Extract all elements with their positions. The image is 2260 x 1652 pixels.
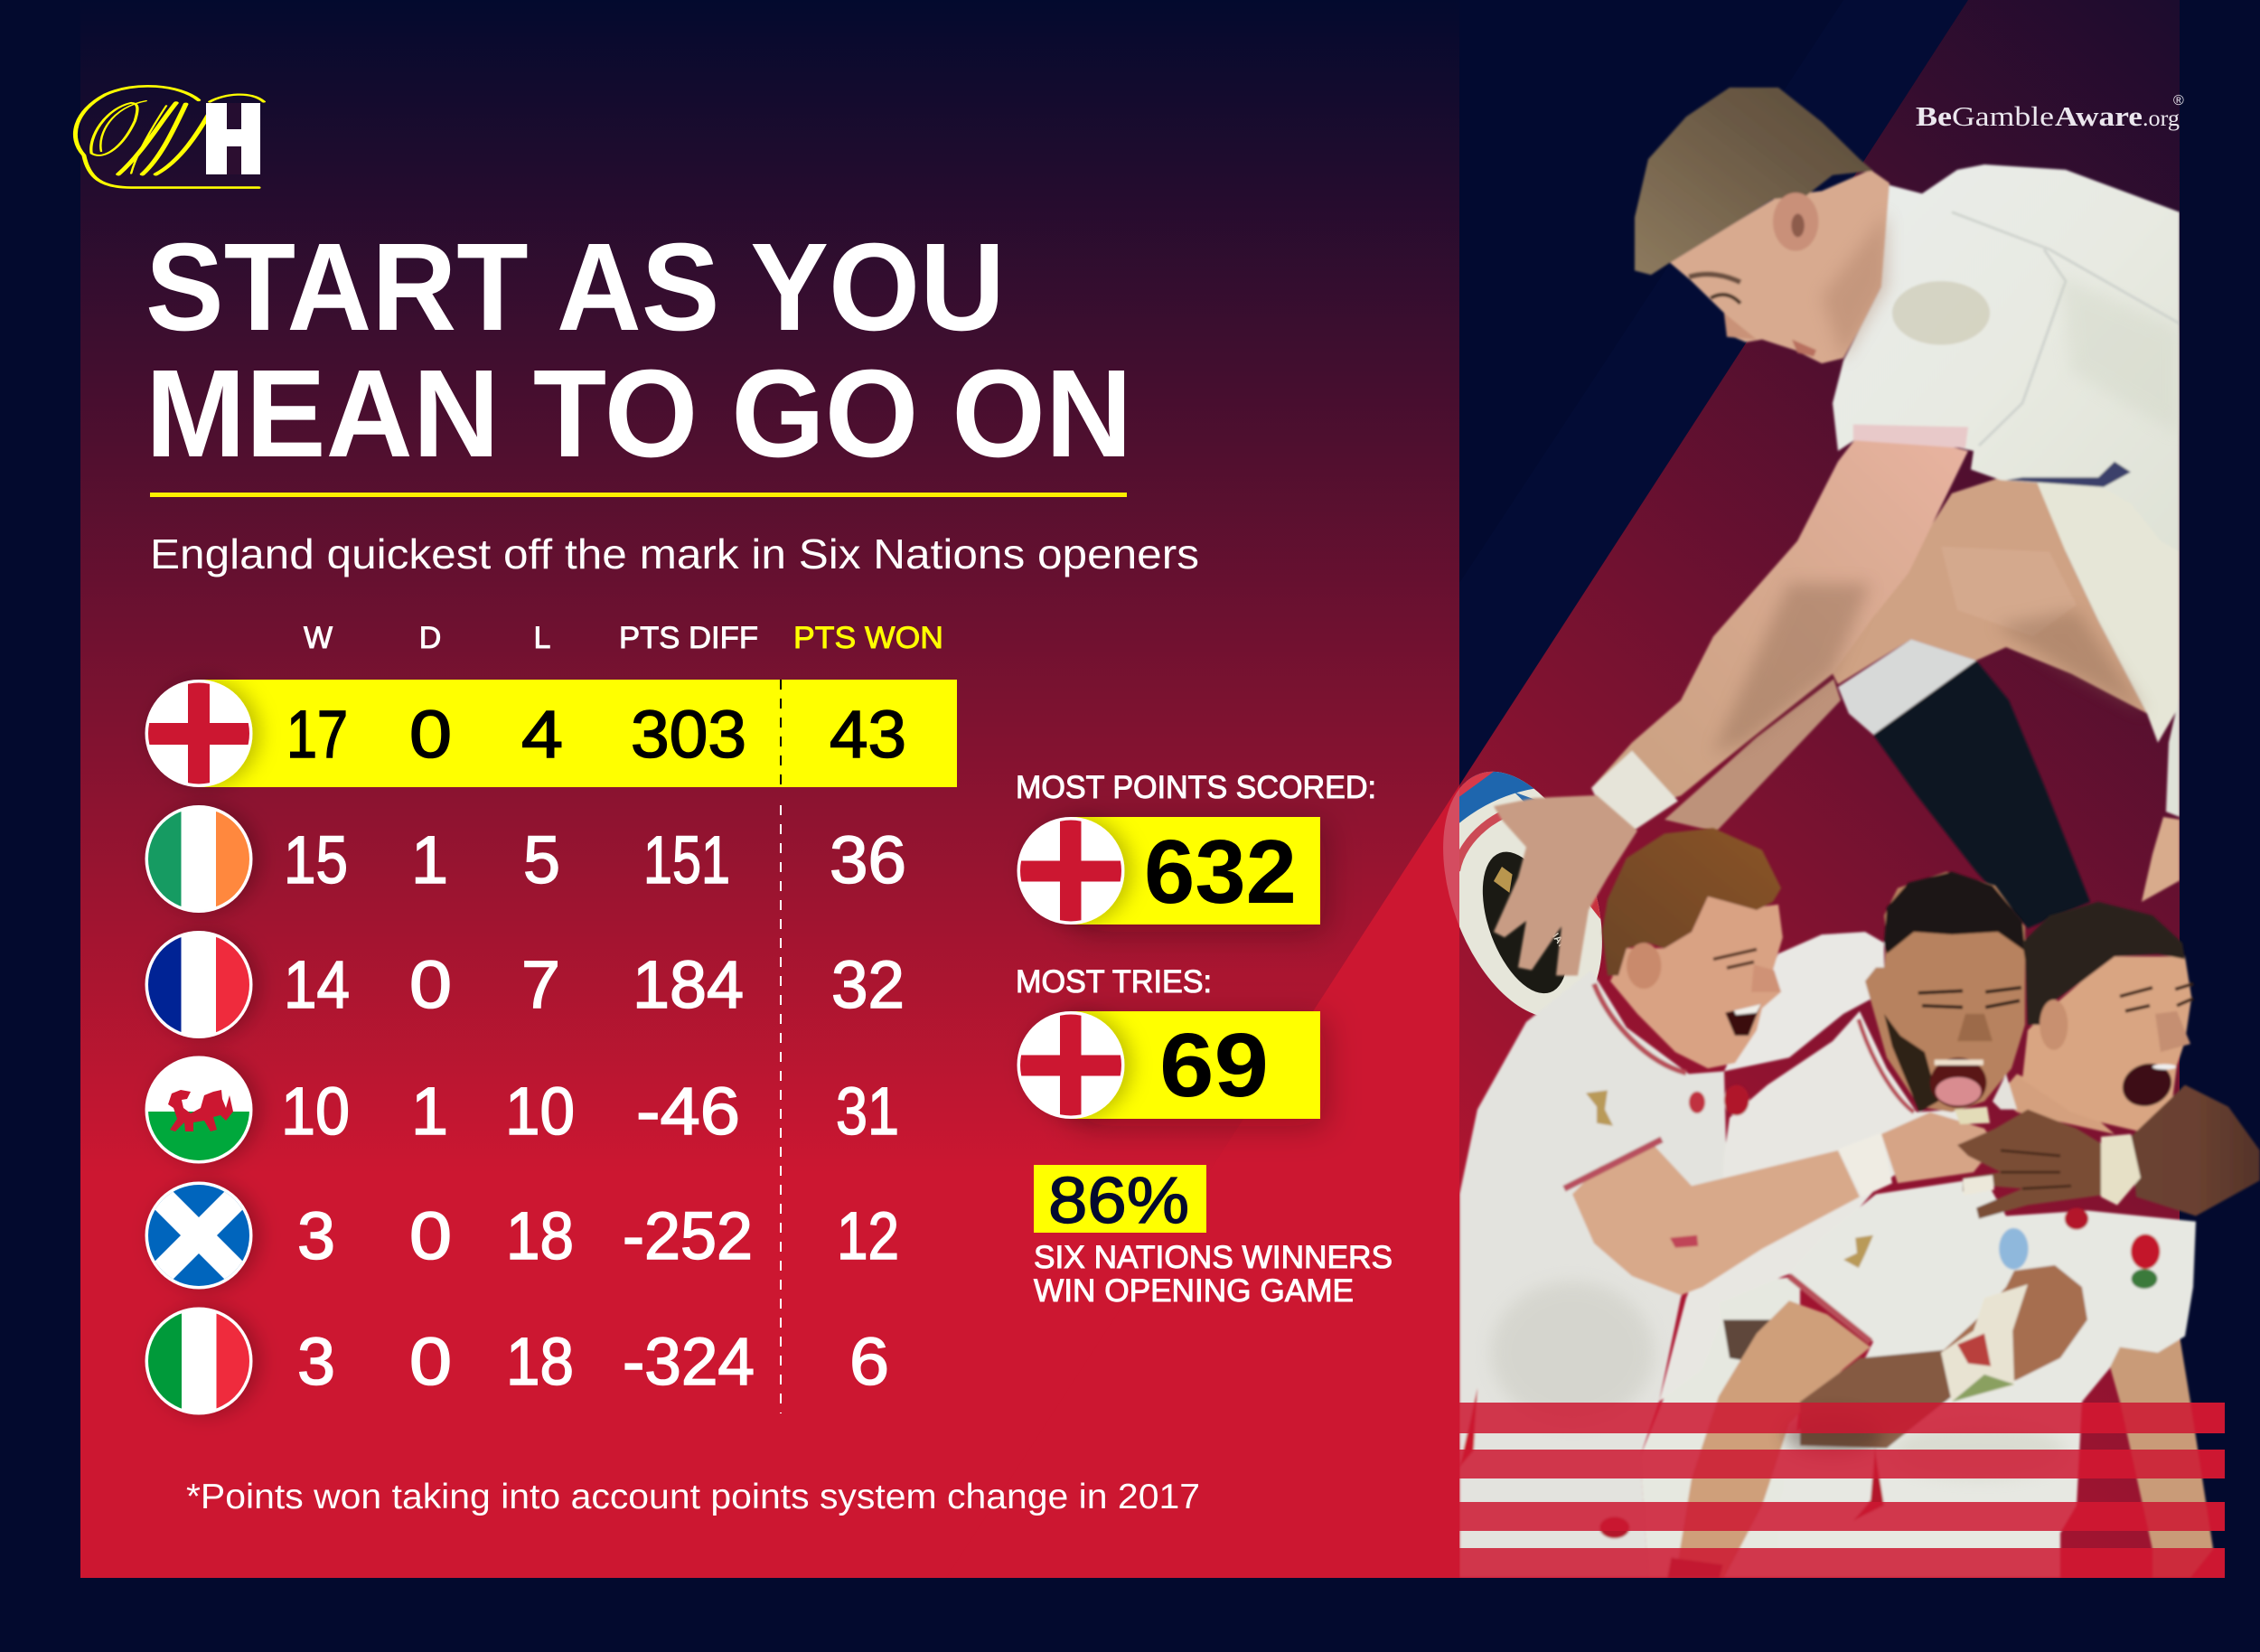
- stat: most tries: MOST TRIES:: [1016, 964, 1212, 1000]
- title underline: [150, 493, 1127, 497]
- middle nose: [1957, 1014, 1993, 1041]
- row: England: 303: [631, 697, 746, 772]
- hips: [1640, 1276, 1800, 1578]
- canterbury logo right: [2065, 1207, 2088, 1230]
- row: Italy: 6: [849, 1324, 889, 1399]
- row: Wales: -46: [636, 1074, 740, 1149]
- far right arm: [2109, 1337, 2213, 1578]
- photo: rugby ball ghost: [1412, 750, 1633, 1039]
- left mouth: [1725, 1004, 1761, 1036]
- row: Ireland: [145, 804, 906, 913]
- stat: 86 percent: WIN OPENING GAME: [1034, 1273, 1354, 1309]
- stripes: translucent overlay: [1459, 1403, 2225, 1578]
- row: Scotland: 0: [409, 1198, 452, 1273]
- stat: most tries: 69: [1159, 1015, 1269, 1116]
- row: Wales: 10: [505, 1074, 575, 1149]
- right player face: [2022, 956, 2191, 1131]
- right player mouth: [2116, 1056, 2178, 1113]
- logo: BeGambleAware: Be: [1916, 100, 1952, 132]
- stat: most points scored: 632: [1144, 821, 1297, 923]
- panel: photo backdrop with diagonals: [946, 0, 2180, 1578]
- row: France: 32: [831, 947, 905, 1022]
- table header: [304, 621, 943, 655]
- row: Ireland: 5: [523, 822, 560, 897]
- subtitle: England quickest off the mark in Six Nations openers: [150, 530, 1199, 577]
- row: Ireland: 15: [284, 822, 348, 897]
- column divider: [780, 680, 782, 1413]
- right player jersey: [1778, 1178, 2196, 1578]
- row: Italy: -324: [623, 1324, 755, 1399]
- row: England: 43: [830, 697, 906, 772]
- logo: BeGambleAware: Aware: [2055, 100, 2143, 132]
- shorts red ribbon left: [1459, 1388, 1477, 1468]
- stripes: background layer: [1459, 1403, 2225, 1578]
- row: Scotland: [145, 1181, 899, 1290]
- row: Scotland: -252: [623, 1198, 753, 1273]
- row: England: [145, 678, 906, 790]
- right player neck: [1998, 1074, 2115, 1134]
- row: Italy: 0: [409, 1324, 452, 1399]
- row: Ireland: 1: [411, 822, 448, 897]
- row: Wales: 31: [836, 1074, 899, 1149]
- title: MEAN TO GO ON: [145, 344, 1132, 483]
- finger tape: [1955, 1107, 1990, 1124]
- tattooed lower back arm: [1723, 1319, 1773, 1361]
- right player hair: [2022, 902, 2185, 1025]
- left sleeve cuff: [1564, 1140, 1662, 1188]
- middle mouth: [1930, 1057, 1986, 1108]
- row: Scotland: 12: [837, 1198, 899, 1273]
- left collar: [1594, 984, 1686, 1073]
- beard: [1884, 1014, 1938, 1112]
- title: START AS YOU: [145, 218, 1005, 357]
- row: France: 7: [521, 947, 560, 1022]
- row: Wales: 10: [281, 1074, 350, 1149]
- left player arm: [1572, 1145, 1860, 1295]
- left player nose: [1751, 964, 1781, 992]
- stat: 86 percent: 86%: [1048, 1165, 1189, 1237]
- left player jersey: [1459, 970, 1727, 1578]
- row: Italy: [145, 1307, 889, 1415]
- wrist tape: [1838, 1133, 1892, 1197]
- sleeve stripes: [1789, 1276, 1871, 1342]
- row: France: 184: [633, 947, 744, 1022]
- rose chest left: [1724, 1084, 1749, 1115]
- middle collar: [1859, 1019, 1914, 1112]
- table header: D: [419, 621, 441, 655]
- title: [145, 218, 1132, 483]
- logo: BeGambleAware: ®: [2173, 93, 2184, 108]
- tape on wrist: [1941, 1284, 2028, 1402]
- table header: PTS WON: [793, 621, 943, 655]
- rose chest right: [2131, 1234, 2160, 1269]
- table header: W: [304, 621, 333, 655]
- middle arm: [1800, 1350, 1952, 1448]
- logo: BeGambleAware: .org: [2143, 107, 2180, 131]
- left player hair: [1602, 828, 1781, 976]
- dark hand: [1957, 1110, 2109, 1219]
- finger creases: [2001, 1150, 2071, 1188]
- gold trophy right: [1843, 1235, 1873, 1268]
- middle hair: [1884, 872, 2025, 953]
- row: Italy: 3: [297, 1324, 335, 1399]
- lower-left arm of right player: [1675, 1300, 1871, 1578]
- row: France: [145, 930, 905, 1038]
- logo: BeGambleAware: Gamble: [1952, 100, 2054, 132]
- left player eye: [1713, 949, 1757, 968]
- footnote: *Points won taking into account points system change in 2017: [186, 1478, 1200, 1516]
- kicker shading: [1713, 212, 2180, 754]
- row: Ireland: 36: [830, 822, 906, 897]
- middle player head: [1865, 872, 2025, 1112]
- left player back sleeve: [1724, 932, 1884, 1071]
- left hand: [1881, 1112, 1995, 1183]
- logo: William Hill: [75, 86, 264, 188]
- fist: [1941, 1265, 2087, 1396]
- stat: 86 percent: [1034, 1165, 1393, 1309]
- left player face: [1610, 896, 1783, 1068]
- row: Scotland: 3: [297, 1198, 335, 1273]
- row: Scotland: 18: [506, 1198, 574, 1273]
- highlight bar: England row: [199, 680, 957, 787]
- row: Ireland: 151: [643, 822, 730, 897]
- row: France: 0: [409, 947, 452, 1022]
- right player nose: [2155, 1011, 2190, 1052]
- middle closed eyes: [1918, 988, 2021, 1008]
- shorts rose: [1599, 1516, 1630, 1538]
- middle player jersey: [1659, 1011, 1974, 1402]
- logo: BeGambleAware: [1916, 93, 2184, 132]
- row: Wales: 1: [411, 1074, 448, 1149]
- photo: kicker: [1591, 88, 2180, 928]
- stat: most tries: [1016, 964, 1320, 1119]
- dark wrist tape: [2101, 1134, 2141, 1205]
- shirt shading: [1491, 1281, 2066, 1478]
- stat: most points scored: [1016, 770, 1376, 925]
- photo: three celebrating players: [1459, 828, 2260, 1578]
- shorts red ribbon right: [1853, 1448, 1884, 1521]
- row: England: 17: [286, 697, 348, 772]
- panel: left gradient: [80, 0, 1459, 1578]
- canterbury logo left: [1689, 1092, 1705, 1113]
- stat: most points scored: MOST POINTS SCORED:: [1016, 770, 1376, 805]
- table header: L: [534, 621, 550, 655]
- row: England: 0: [409, 697, 452, 772]
- world cup badge: [1999, 1228, 2029, 1270]
- photo: rugby ball: [1459, 772, 1638, 1016]
- gold trophy left: [1586, 1090, 1613, 1126]
- row: France: 14: [284, 947, 350, 1022]
- row: Italy: 18: [506, 1324, 574, 1399]
- dark forearm: [2131, 1084, 2260, 1216]
- stat: 86 percent: SIX NATIONS WINNERS: [1034, 1240, 1393, 1275]
- row: Wales: [145, 1056, 899, 1166]
- left ear: [1627, 943, 1661, 989]
- row: England: 4: [521, 697, 563, 772]
- right player eyes: [2120, 984, 2193, 1011]
- table header: PTS DIFF: [619, 621, 758, 655]
- photo: rugby ball: SIX NATIONS: [1536, 913, 1581, 970]
